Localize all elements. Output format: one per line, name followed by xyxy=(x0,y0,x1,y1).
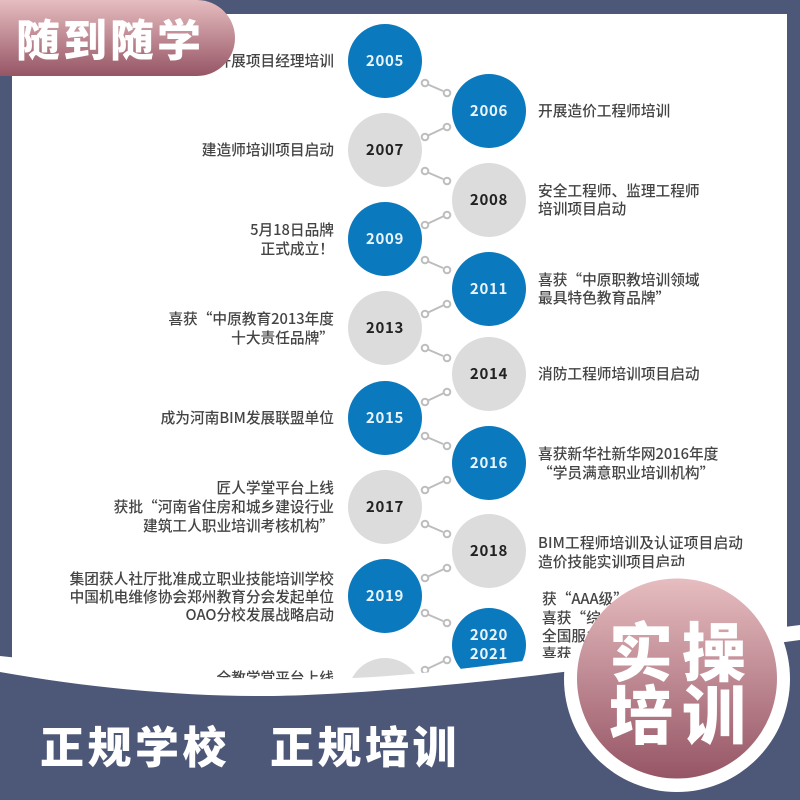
milestone 2018: 2018 xyxy=(470,540,508,561)
connectors xyxy=(422,80,450,673)
2020 milestone description xyxy=(542,591,619,658)
milestone 2009: 2009 xyxy=(366,228,404,249)
milestone 2005: 开展项目经理培训 xyxy=(216,50,334,71)
2020 milestone description: 获“AAA级” xyxy=(542,588,628,609)
milestone 2006: 2006 xyxy=(470,100,508,121)
milestone 2016: 2016 xyxy=(470,452,508,473)
milestone 2020 2021: 2021 xyxy=(470,643,508,664)
milestone 2020 2021: 2020 xyxy=(470,624,508,645)
milestone 2016: 喜获新华社新华网2016年度 xyxy=(538,443,719,464)
milestone 2009: 正式成立！ xyxy=(261,238,334,259)
milestone 2017: 建筑工人职业培训考核机构” xyxy=(143,515,334,536)
milestone 2006: 开展造价工程师培训 xyxy=(538,100,670,121)
milestone 2022: 全教学堂平台上线 xyxy=(216,667,334,688)
milestone 2018: 造价技能实训项目启动 xyxy=(538,551,685,572)
milestone 2016 xyxy=(452,426,719,500)
white curved band xyxy=(0,625,800,700)
milestone 2018: BIM工程师培训及认证项目启动 xyxy=(538,532,743,553)
milestone 2019: 2019 xyxy=(366,585,404,606)
milestone 2006 xyxy=(452,74,670,148)
milestone 2020 2021 xyxy=(452,608,526,682)
milestone 2015: 2015 xyxy=(366,407,404,428)
bottom slogan: 正规学校 xyxy=(40,712,230,776)
milestone 2009: 5月18日品牌 xyxy=(250,219,334,240)
milestone 2007: 2007 xyxy=(366,139,404,160)
milestone 2007 xyxy=(202,113,422,187)
milestone 2011: 2011 xyxy=(470,278,508,299)
milestone 2014 xyxy=(452,337,700,411)
milestone 2013 xyxy=(168,291,422,365)
milestone 2007: 建造师培训项目启动 xyxy=(202,139,334,160)
bottom slogan 2: 正规培训 xyxy=(270,712,460,776)
milestone 2017 xyxy=(114,470,422,544)
milestone 2011 xyxy=(452,252,700,326)
dark bottom area xyxy=(0,640,800,800)
milestone 2019 xyxy=(70,559,422,633)
milestone 2005: 2005 xyxy=(366,50,404,71)
milestone 2008: 培训项目启动 xyxy=(538,198,626,219)
2020 milestone description: 全国服务 xyxy=(542,625,601,646)
milestone 2013: 十大责任品牌” xyxy=(231,327,334,348)
milestone 2011: 喜获“中原职教培训领域 xyxy=(538,269,700,290)
milestone 2014: 2014 xyxy=(470,363,508,384)
milestone 2017: 匠人学堂平台上线 xyxy=(216,477,334,498)
milestone 2022 xyxy=(216,658,422,732)
milestone 2014: 消防工程师培训项目启动 xyxy=(538,363,700,384)
milestone 2009 xyxy=(250,202,422,276)
milestone 2018 xyxy=(452,514,743,588)
milestone 2013: 喜获“中原教育2013年度 xyxy=(168,308,334,329)
milestone 2008: 安全工程师、监理工程师 xyxy=(538,180,700,201)
milestone 2008: 2008 xyxy=(470,189,508,210)
badge: 实操培训: 培训 xyxy=(609,666,755,758)
milestone 2015 xyxy=(161,381,422,455)
timeline xyxy=(70,24,743,732)
2020 milestone description: 喜获“综合 xyxy=(542,607,616,628)
badge: 实操培训 xyxy=(577,578,777,778)
milestone 2015: 成为河南BIM发展联盟单位 xyxy=(161,407,334,428)
milestone 2017: 获批“河南省住房和城乡建设行业 xyxy=(114,496,334,517)
milestone 2013: 2013 xyxy=(366,317,404,338)
milestone 2019: OAO分校发展战略启动 xyxy=(186,604,334,625)
milestone 2005 xyxy=(216,24,422,98)
milestone 2017: 2017 xyxy=(366,496,404,517)
milestone 2019: 集团获人社厅批准成立职业技能培训学校 xyxy=(70,568,334,589)
banner: 随到随学: 随到随学 xyxy=(16,5,204,69)
milestone 2008 xyxy=(452,163,700,237)
banner: 随到随学 xyxy=(0,0,235,76)
badge: 实操培训: 实操 xyxy=(609,603,755,695)
milestone 2019: 中国机电维修协会郑州教育分会发起单位 xyxy=(70,586,334,607)
milestone 2016: “学员满意职业培训机构” xyxy=(538,462,714,483)
2020 milestone description: 喜获 xyxy=(542,643,572,664)
badge ring xyxy=(564,566,790,792)
milestone 2011: 最具特色教育品牌” xyxy=(538,287,670,308)
